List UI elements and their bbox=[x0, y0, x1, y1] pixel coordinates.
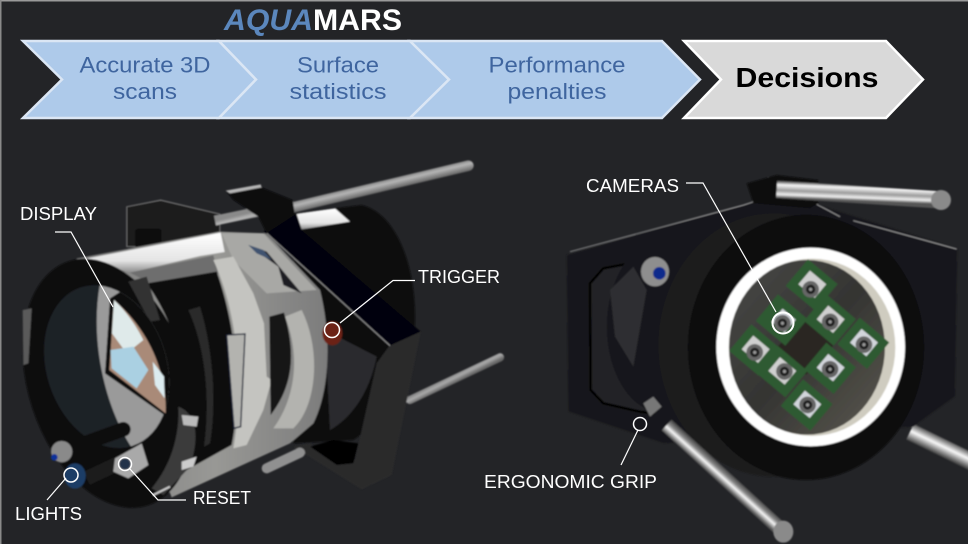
camera 4 bbox=[804, 343, 856, 394]
far rod bbox=[910, 432, 968, 463]
grip lever bbox=[643, 397, 662, 417]
front black ring bbox=[688, 215, 924, 480]
side latch bbox=[227, 334, 245, 428]
fan detail bbox=[248, 245, 302, 293]
black cylinder bands bbox=[147, 272, 237, 470]
camera 2 bbox=[804, 294, 856, 346]
chevron: Accurate 3D scans bbox=[23, 41, 256, 118]
callout: DISPLAY bbox=[20, 204, 113, 307]
rear cylinder bbox=[607, 240, 720, 413]
process chevrons bbox=[23, 41, 923, 118]
lens interior bbox=[43, 284, 170, 449]
frame plate bbox=[567, 178, 957, 443]
top clamp and black strap bbox=[215, 184, 421, 346]
camera 1 bbox=[786, 259, 838, 311]
callout: CAMERAS bbox=[586, 176, 794, 334]
sensor board centre bbox=[777, 318, 833, 375]
callout: ERGONOMIC GRIP: ERGONOMIC GRIP bbox=[484, 472, 657, 492]
camera 6 bbox=[756, 346, 808, 397]
translucent shoulder bbox=[130, 255, 218, 284]
front ring bbox=[0, 237, 224, 530]
near-left rod bbox=[667, 425, 793, 543]
top clamp bbox=[747, 175, 818, 208]
ring transparent rim bbox=[23, 277, 198, 495]
camera 7 bbox=[729, 324, 781, 376]
callout: ERGONOMIC GRIP bbox=[484, 418, 657, 492]
chevron: Performance penalties bbox=[410, 41, 700, 118]
rear housing bbox=[293, 205, 415, 443]
device: right view, from rear camera side bbox=[567, 175, 968, 543]
display screen bbox=[109, 300, 166, 413]
light button bbox=[641, 257, 669, 286]
glass housing bbox=[658, 213, 888, 477]
dark window bbox=[269, 313, 291, 415]
main cylinder bbox=[77, 232, 328, 497]
callout: RESET bbox=[118, 458, 251, 508]
white light ring bbox=[716, 248, 905, 446]
trigger button bbox=[322, 321, 342, 345]
chevron: Decisions: Decisions bbox=[736, 62, 878, 93]
callout: TRIGGER bbox=[324, 267, 500, 338]
rods bbox=[293, 166, 500, 400]
chevron: Accurate 3D scans: scans bbox=[113, 79, 177, 104]
speckled rim bbox=[729, 259, 895, 436]
camera 8 bbox=[756, 294, 808, 346]
grip opening bbox=[590, 263, 653, 413]
callout: DISPLAY: DISPLAY bbox=[20, 204, 97, 224]
camera 3 bbox=[837, 318, 889, 369]
device: left view, angled from front bbox=[0, 166, 500, 530]
callout: LIGHTS: LIGHTS bbox=[15, 504, 82, 524]
bottom peg bbox=[267, 453, 300, 468]
camera 5 bbox=[781, 379, 833, 431]
top highlight bbox=[86, 233, 225, 273]
rear bracket bbox=[127, 200, 220, 247]
chevron: Decisions bbox=[684, 41, 923, 118]
camera array bbox=[729, 259, 889, 431]
rear frame bbox=[293, 332, 421, 489]
callout: TRIGGER: TRIGGER bbox=[418, 267, 500, 287]
chevron: Surface statistics bbox=[219, 41, 449, 118]
camera bay bbox=[729, 260, 885, 435]
title: AQUAMARS: AQUAMARS bbox=[223, 4, 402, 37]
chevron: Surface statistics: Surface bbox=[297, 52, 379, 78]
chevron: Performance penalties: Performance bbox=[488, 52, 626, 78]
light plastic bands bbox=[213, 257, 272, 448]
callout: CAMERAS: CAMERAS bbox=[586, 176, 679, 196]
chevron: Performance penalties: penalties bbox=[508, 79, 606, 104]
chevron: Surface statistics: statistics bbox=[290, 79, 386, 104]
frame top edges bbox=[570, 177, 957, 252]
cable and controls bbox=[51, 429, 148, 489]
callout: LIGHTS bbox=[15, 468, 82, 524]
chevron: Accurate 3D scans: Accurate 3D bbox=[80, 52, 210, 78]
callout: RESET: RESET bbox=[193, 488, 251, 508]
rear knob bbox=[135, 228, 162, 248]
top rod bbox=[777, 189, 951, 210]
